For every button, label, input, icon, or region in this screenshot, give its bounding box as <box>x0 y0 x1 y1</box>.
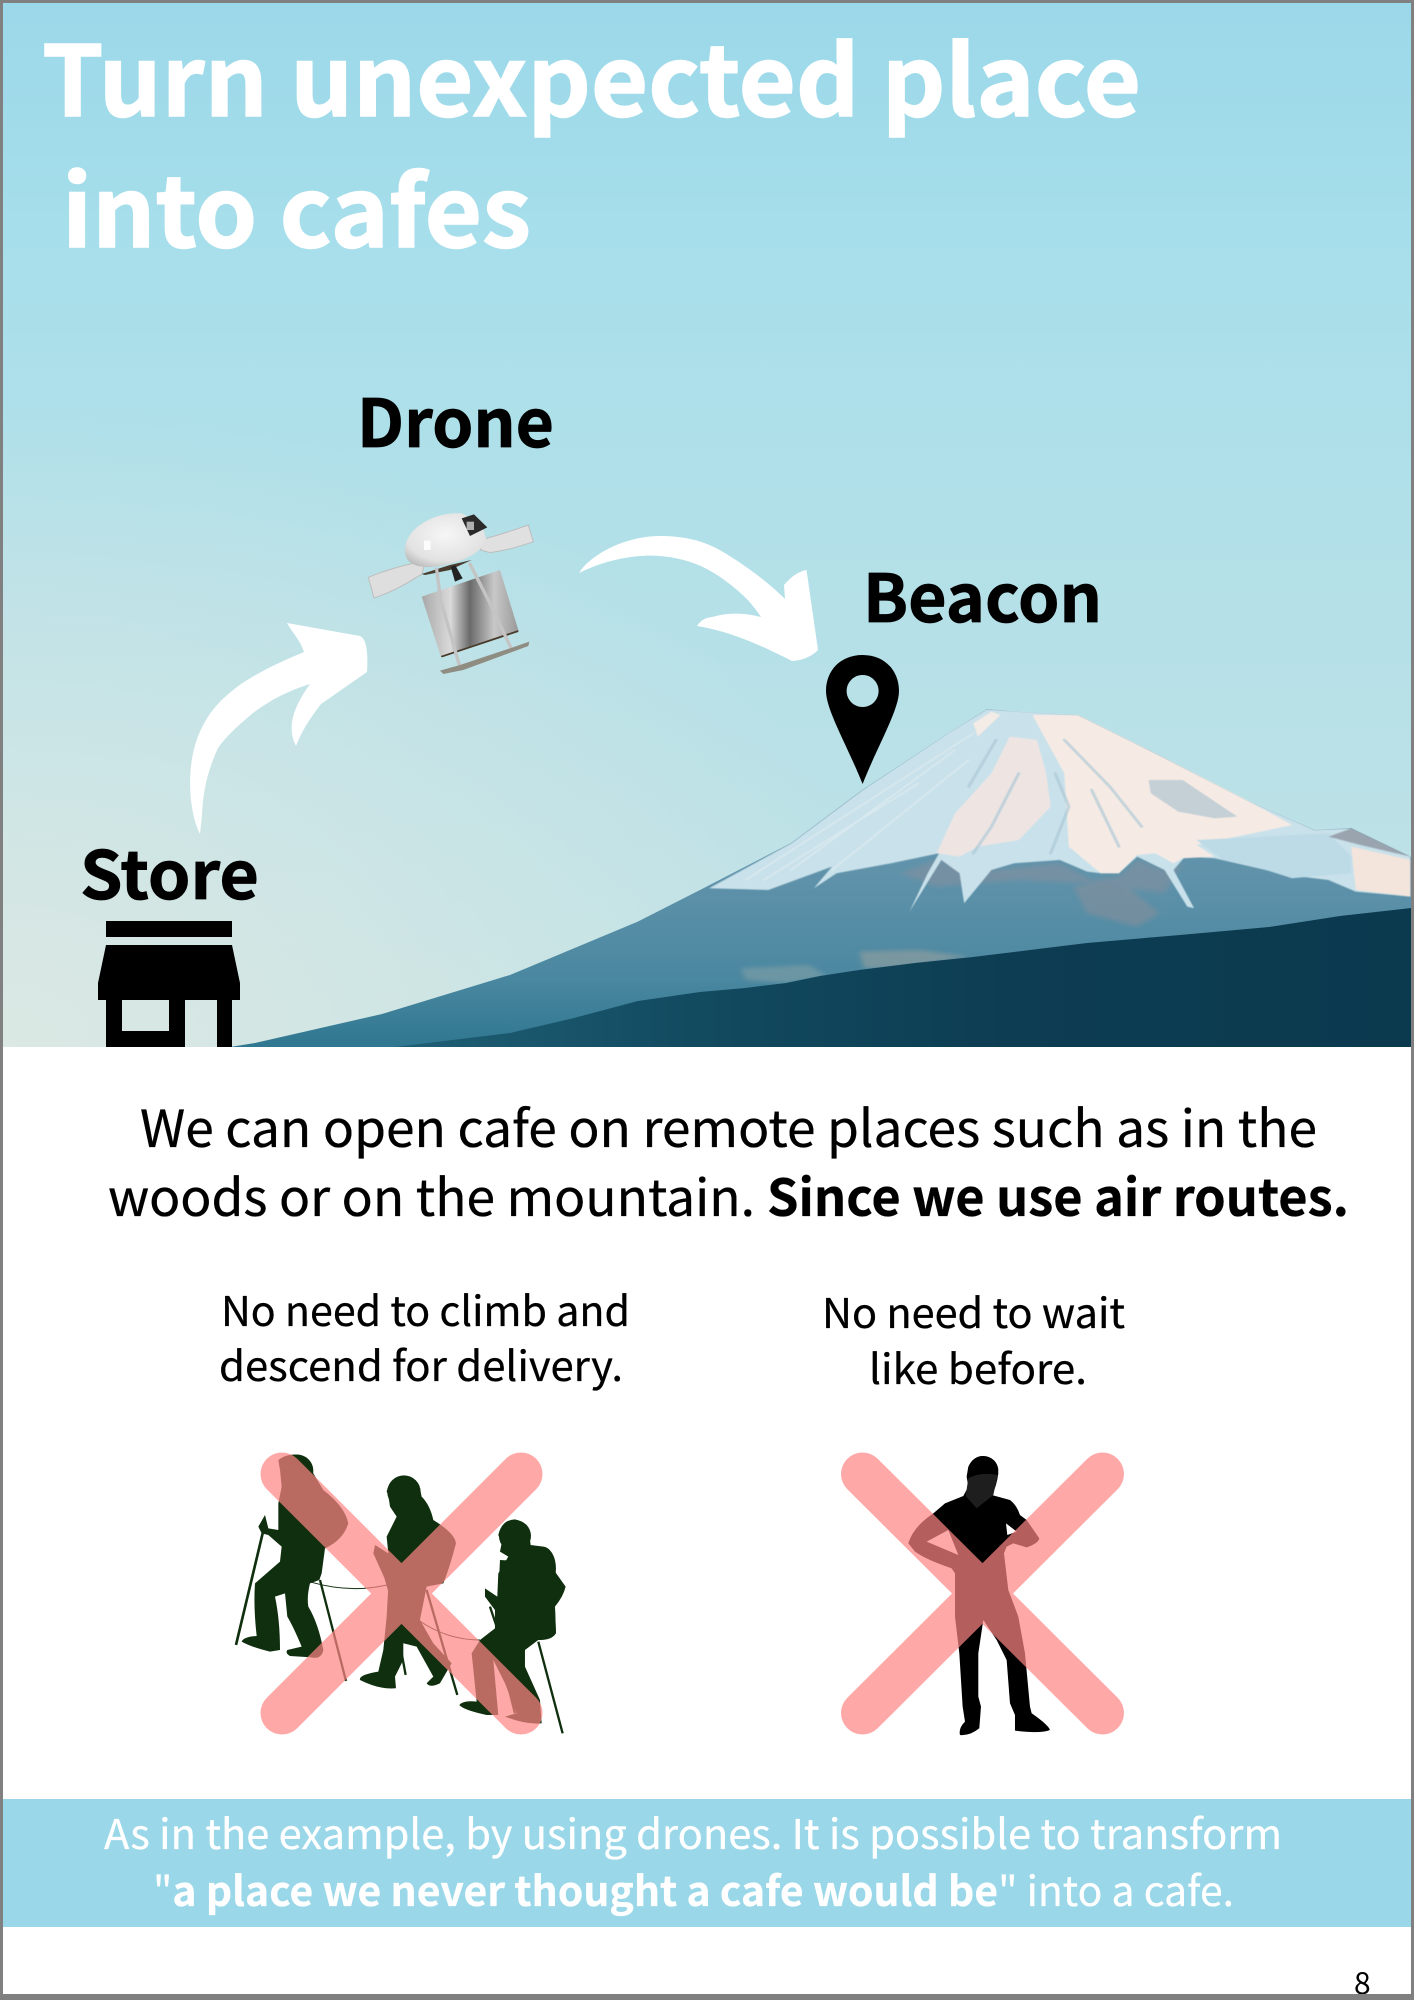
panel: mountain photo <box>3 3 1411 1047</box>
text block: no wait: like before. <box>869 1336 1087 1396</box>
panel: summary banner <box>3 1799 1411 1927</box>
summary text: "a place we never thought a cafe would be" into a cafe. <box>153 1858 1234 1918</box>
icon: red cross <box>862 1474 1102 1713</box>
arrow: drone to beacon <box>579 536 818 661</box>
icon: store <box>98 921 240 1047</box>
text block: no climb: No need to climb and <box>221 1278 630 1338</box>
title: into cafes <box>62 134 531 275</box>
label: store: Store <box>80 823 259 919</box>
label: beacon: Beacon <box>863 546 1102 642</box>
icon: hikers <box>236 1454 566 1733</box>
text block: no wait: No need to wait <box>822 1280 1125 1340</box>
illustration: waiting man crossed out <box>862 1456 1102 1735</box>
text block: intro: Since we use air routes. <box>767 1157 1349 1231</box>
label: drone: Drone <box>357 371 554 467</box>
text block: no climb <box>219 1278 630 1393</box>
icon: drone <box>368 513 533 674</box>
text block: intro: We can open cafe on remote places such as in the <box>140 1088 1317 1162</box>
summary text <box>104 1801 1282 1918</box>
text block: no wait <box>822 1280 1125 1396</box>
text block: no climb: descend for delivery. <box>219 1333 623 1393</box>
text block: intro <box>108 1088 1349 1231</box>
illustration: hikers crossed out <box>236 1454 566 1733</box>
summary text: As in the example, by using drones. It is possible to transform <box>104 1801 1282 1861</box>
icon: red cross <box>282 1474 521 1713</box>
icon: location pin <box>826 655 899 784</box>
title: Turn unexpected place <box>42 3 1141 144</box>
title <box>42 3 1141 275</box>
arrow: store to drone <box>190 623 367 834</box>
icon: man silhouette <box>908 1456 1050 1735</box>
text block: intro: woods or on the mountain. <box>108 1157 755 1231</box>
